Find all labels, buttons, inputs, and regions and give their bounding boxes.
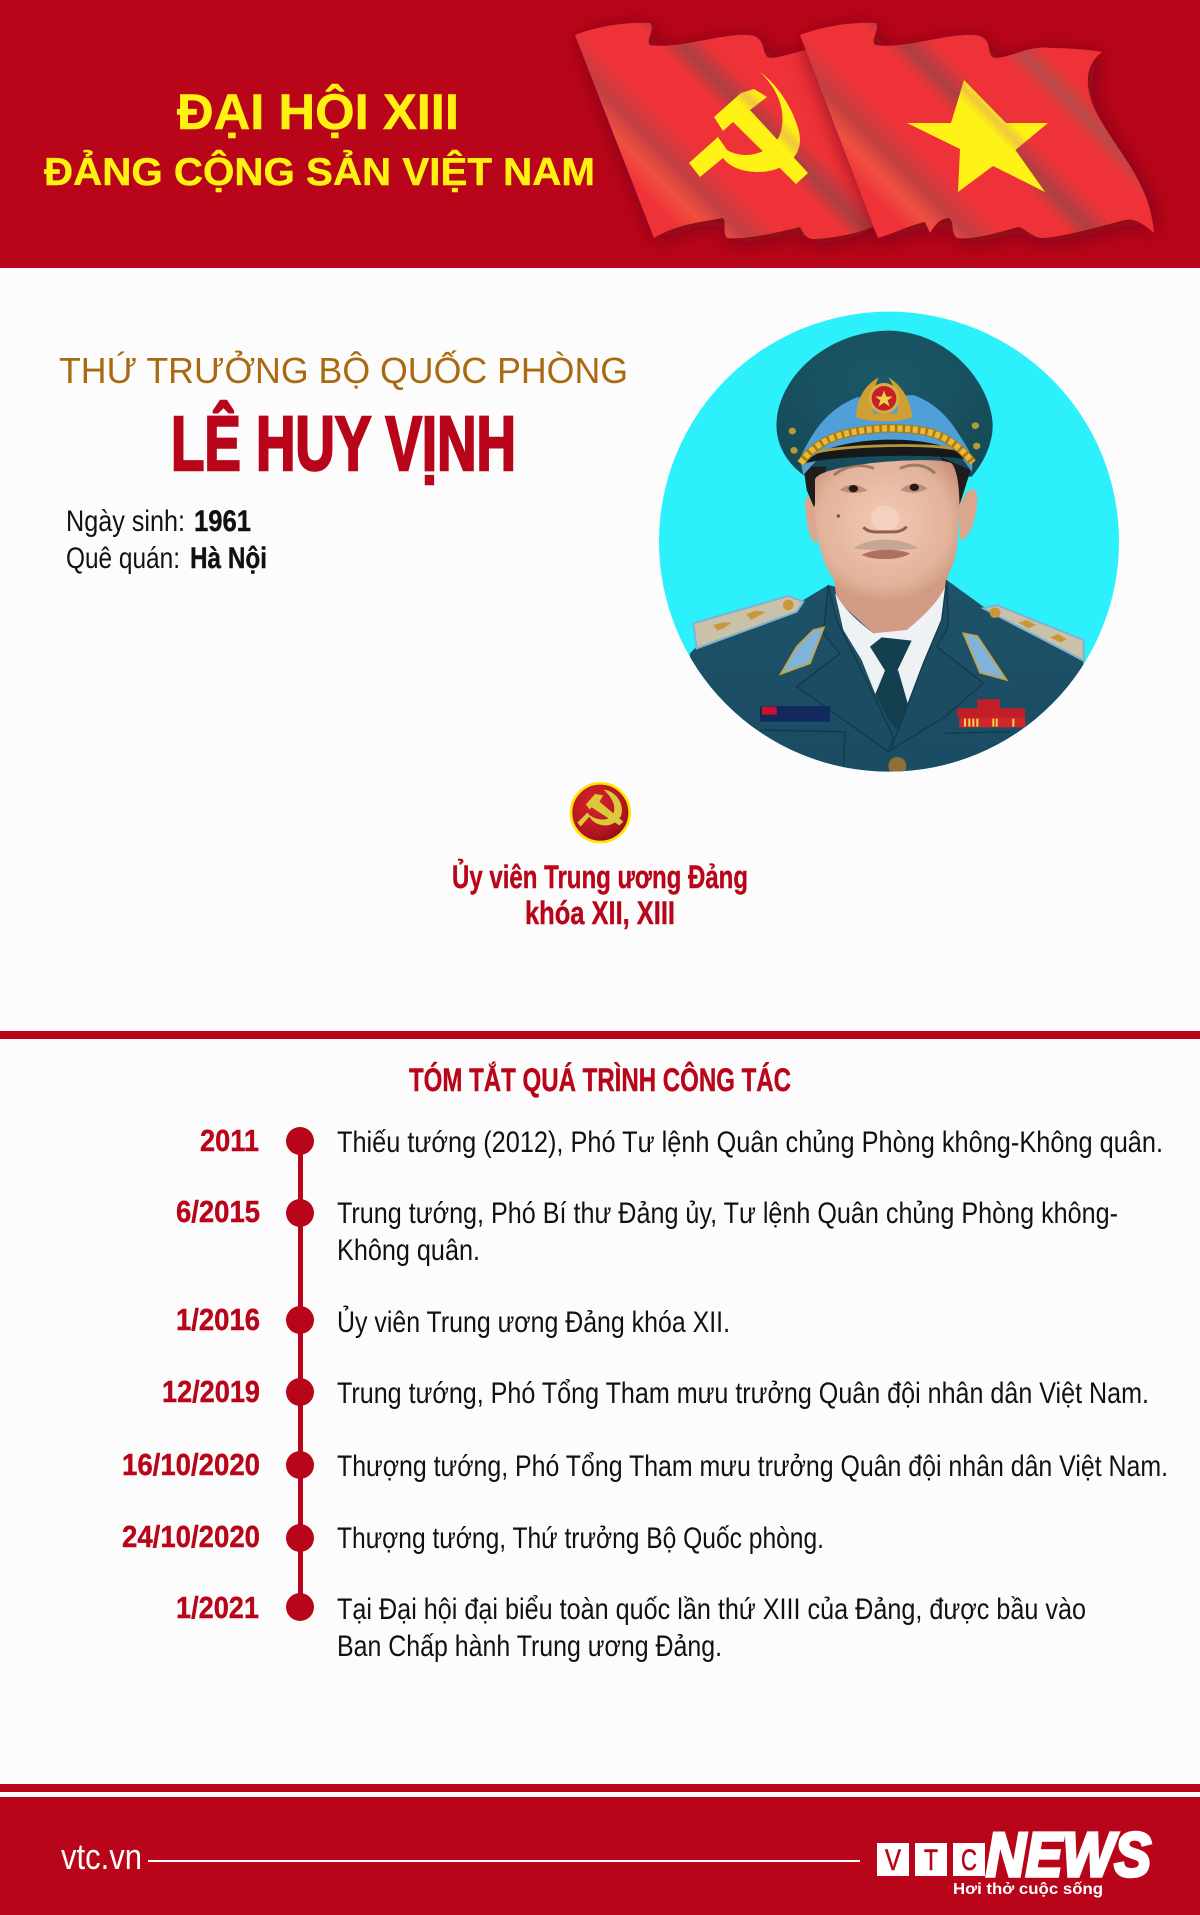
icon: party emblem	[571, 783, 630, 842]
VTC News logo: Hơi thở cuộc sống	[953, 1881, 1103, 1898]
VTC News logo	[877, 1821, 1151, 1898]
VTC News logo: T	[924, 1844, 938, 1877]
ears	[805, 497, 817, 543]
entry 6/2015: 6/2015	[176, 1194, 260, 1229]
mole	[837, 514, 840, 518]
cap badge	[856, 377, 912, 421]
entry 12/2019: 12/2019	[162, 1374, 260, 1409]
personal info: 1961	[194, 505, 251, 538]
hair	[803, 457, 971, 508]
timeline axis	[298, 1141, 303, 1607]
entry 1/2016: Ủy viên Trung ương Đảng khóa XII.	[337, 1305, 730, 1339]
mouth	[862, 550, 910, 559]
header banner	[0, 0, 1200, 268]
neck	[834, 574, 948, 634]
entry 24/10/2020	[122, 1519, 824, 1555]
brows	[834, 465, 935, 475]
epaulettes	[693, 596, 803, 648]
website label: vtc.vn	[61, 1836, 142, 1877]
entry 1/2021	[176, 1590, 1086, 1663]
cap crown	[776, 331, 993, 477]
button	[888, 757, 906, 772]
entry 1/2016: 1/2016	[176, 1302, 260, 1337]
lapels	[797, 585, 893, 752]
nose	[871, 506, 899, 531]
entry 1/2016	[176, 1302, 730, 1339]
section heading: TÓM TẮT QUÁ TRÌNH CÔNG TÁC	[409, 1062, 791, 1098]
personal info: Ngày sinh:	[66, 505, 185, 538]
footer	[0, 1784, 1200, 1915]
personal info: Quê quán:	[66, 542, 180, 575]
party membership caption: khóa XII, XIII	[525, 895, 675, 931]
VTC News logo: C	[961, 1844, 977, 1877]
entry 24/10/2020: Thượng tướng, Thứ trưởng Bộ Quốc phòng.	[337, 1522, 824, 1555]
title line 1: ĐẠI HỘI XIII	[177, 83, 459, 140]
jacket	[687, 580, 1087, 777]
party membership caption: Ủy viên Trung ương Đảng	[452, 859, 748, 895]
VTC News logo: NEWS	[986, 1821, 1151, 1890]
timeline	[122, 1123, 1168, 1663]
entry 24/10/2020: 24/10/2020	[122, 1519, 260, 1554]
moustache shade	[853, 540, 918, 550]
tie	[870, 637, 912, 737]
collar tabs	[781, 627, 824, 674]
personal info: Hà Nội	[190, 542, 267, 575]
entry 1/2021: Ban Chấp hành Trung ương Đảng.	[337, 1630, 722, 1663]
name heading: LÊ HUY VỊNH	[171, 400, 516, 487]
eyes	[840, 484, 927, 493]
personal info	[66, 505, 267, 575]
title line 2: ĐẢNG CỘNG SẢN VIỆT NAM	[44, 149, 595, 194]
party membership caption	[452, 859, 748, 931]
entry 6/2015: Không quân.	[337, 1234, 480, 1267]
cap cord	[801, 428, 973, 463]
icon: waving party flag with hammer and sickle	[575, 23, 880, 239]
entry 1/2021: 1/2021	[176, 1590, 259, 1625]
portrait photo in circle	[659, 312, 1119, 777]
cap band	[800, 395, 972, 475]
face	[815, 460, 959, 599]
ribbons	[957, 699, 1025, 727]
name tag	[760, 706, 830, 722]
cap visor	[805, 440, 968, 463]
entry 6/2015	[176, 1194, 1118, 1267]
entry 2011: 2011	[200, 1123, 259, 1158]
cap buttons	[789, 422, 980, 454]
shirt	[835, 585, 947, 705]
subtitle: position: THỨ TRƯỞNG BỘ QUỐC PHÒNG	[59, 349, 628, 391]
VTC News logo: V	[885, 1844, 901, 1877]
icon: waving national flag with star	[800, 23, 1154, 238]
entry 16/10/2020: 16/10/2020	[122, 1447, 260, 1482]
section divider	[0, 1031, 1200, 1039]
